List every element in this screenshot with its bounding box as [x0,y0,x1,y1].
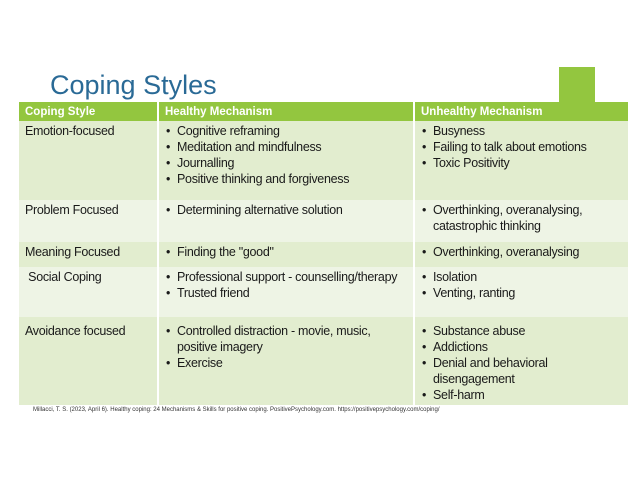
table: Venting, ranting [433,286,515,300]
table: Social Coping [28,270,101,284]
table: Addictions [433,340,488,354]
title: Coping Styles [50,70,217,100]
table: Coping Style [25,106,95,118]
table: Unhealthy Mechanism [421,106,542,118]
table: Overthinking, overanalysing, catastrophic thinking [433,203,582,233]
table: Problem Focused [25,203,118,217]
table: Overthinking, overanalysing [433,245,579,259]
table: Meditation and mindfulness [177,140,321,154]
table: Isolation [433,270,477,284]
table: Busyness [433,124,485,138]
table: Trusted friend [177,286,249,300]
table [19,102,628,405]
table: Denial and behavioral disengagement [433,356,548,386]
table: Meaning Focused [25,245,120,259]
table: Professional support - counselling/therapy [177,270,397,284]
table: Failing to talk about emotions [433,140,587,154]
table: Toxic Positivity [433,156,509,170]
table: Avoidance focused [25,324,125,338]
table: Journalling [177,156,234,170]
table: Positive thinking and forgiveness [177,172,349,186]
table: Exercise [177,356,223,370]
table: Finding the "good" [177,245,274,259]
table: Emotion-focused [25,124,114,138]
citation: Millacci, T. S. (2023, April 6). Healthy coping: 24 Mechanisms & Skills for positive coping. PositivePsychology.com. https://positivepsychology.com/coping/ [33,407,440,413]
table: Self-harm [433,388,484,402]
table: Controlled distraction - movie, music, positive imagery [177,324,371,354]
table: Cognitive reframing [177,124,280,138]
decorative green square [559,67,595,102]
table: Healthy Mechanism [165,106,272,118]
table: Determining alternative solution [177,203,342,217]
table: Substance abuse [433,324,525,338]
